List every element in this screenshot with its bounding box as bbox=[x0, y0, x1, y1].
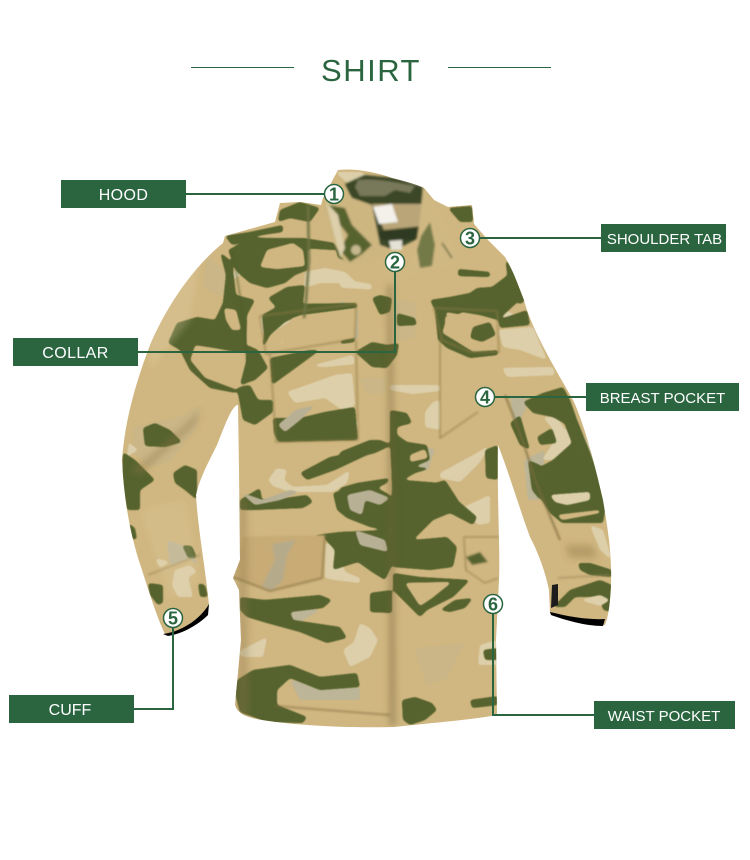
left collar bbox=[323, 195, 388, 264]
callout: shoulder tab bbox=[460, 224, 726, 252]
hem seam bbox=[275, 706, 390, 715]
hood drawstring bbox=[304, 205, 309, 318]
callout: hood bbox=[61, 180, 344, 208]
chest pocket left outline bbox=[260, 304, 358, 442]
callout: cuff: CUFF bbox=[49, 702, 92, 719]
callout: shoulder tab: 3 bbox=[465, 228, 475, 248]
callout: waist pocket bbox=[484, 594, 735, 729]
callout: breast pocket: BREAST POCKET bbox=[600, 390, 725, 407]
callout: hood: HOOD bbox=[99, 187, 148, 204]
title text: SHIRT bbox=[321, 53, 421, 88]
callout: waist pocket: WAIST POCKET bbox=[608, 708, 720, 725]
size tag bbox=[389, 240, 402, 250]
camo: pale grey-tan bbox=[168, 302, 545, 700]
neck lining bbox=[345, 175, 425, 250]
fabric folds and seams bbox=[148, 175, 610, 715]
callout: breast pocket: 4 bbox=[480, 388, 490, 408]
camo: grey accents over olive bbox=[240, 178, 420, 552]
camo: sand and light highlights over olive bbox=[224, 243, 610, 606]
callout: breast pocket bbox=[476, 383, 739, 411]
title rule right bbox=[448, 67, 551, 68]
callout: collar bbox=[13, 252, 404, 366]
chest pocket right outline bbox=[434, 308, 499, 438]
callout: cuff bbox=[9, 608, 182, 723]
callout: waist pocket: 6 bbox=[488, 594, 498, 614]
shoulder seam bbox=[234, 268, 248, 360]
callout: collar: 2 bbox=[390, 252, 400, 272]
callout: shoulder tab: SHOULDER TAB bbox=[607, 231, 722, 248]
callout: collar: COLLAR bbox=[42, 345, 109, 362]
callout: hood: 1 bbox=[329, 184, 339, 204]
button on collar bbox=[351, 245, 361, 255]
jacket illustration bbox=[110, 160, 630, 740]
camo: olive bbox=[122, 202, 612, 725]
camo: light sand bbox=[125, 172, 612, 718]
cuff linings bbox=[163, 584, 605, 636]
waist pocket flap left bbox=[233, 535, 325, 591]
cuff seams bbox=[148, 555, 610, 578]
soft fabric shading bbox=[130, 260, 598, 725]
garment label bbox=[373, 204, 398, 224]
callout: cuff: 5 bbox=[168, 608, 178, 628]
waist pocket flap right bbox=[464, 537, 502, 585]
right collar bbox=[415, 187, 454, 269]
right sleeve gusset seam bbox=[505, 395, 560, 540]
title rule left bbox=[191, 67, 294, 68]
